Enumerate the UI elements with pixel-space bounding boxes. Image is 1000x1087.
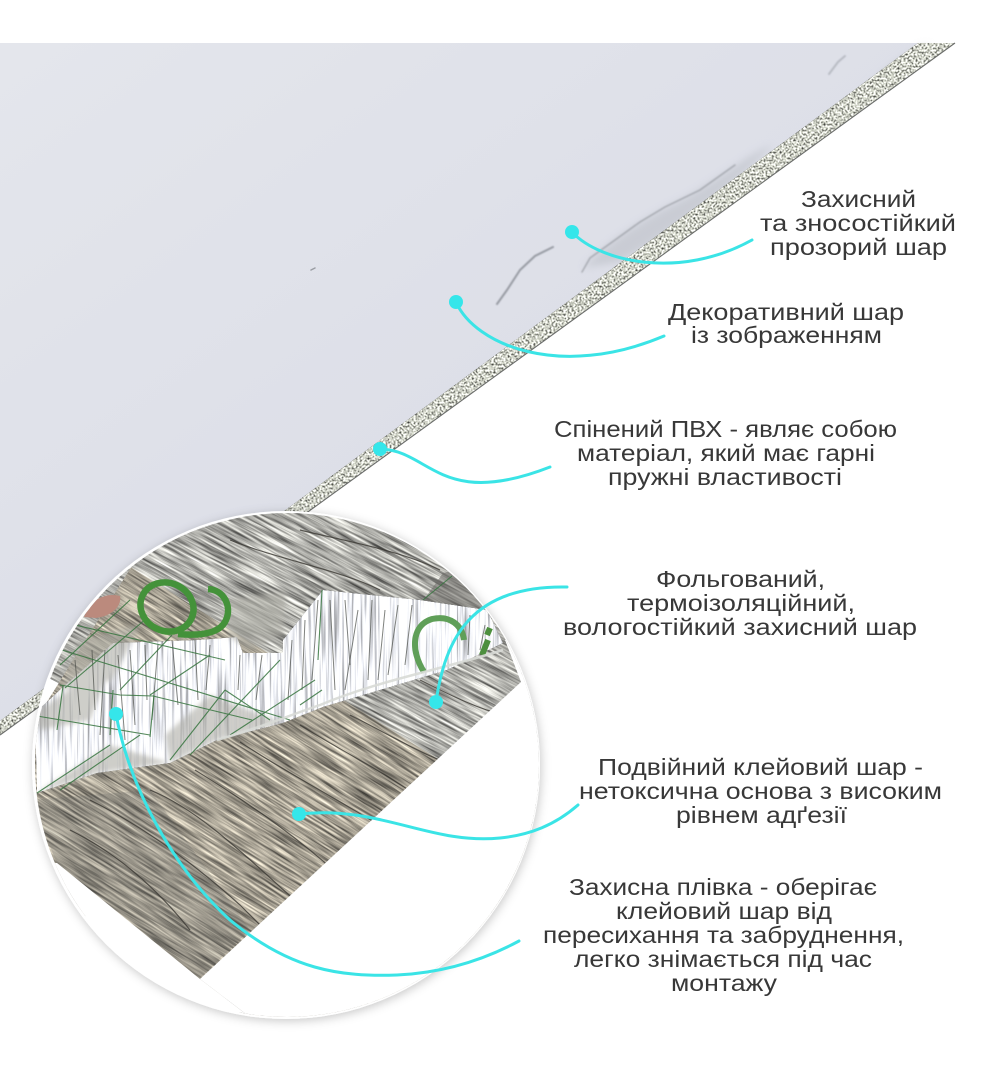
marble surface (0, 43, 955, 735)
finger (84, 595, 120, 618)
label text: Спінений ПВХ - являє собою (554, 416, 897, 442)
marker dot (565, 225, 579, 239)
marker dot (449, 295, 463, 309)
green reinforcing mesh (37, 576, 452, 793)
label text: та зносостійкий (760, 210, 956, 236)
panel: magnified back layers circle (28, 508, 546, 1026)
magnified photo (35, 513, 539, 1017)
label text: вологостійкий захисний шар (563, 614, 917, 640)
label text: клейовий шар від (616, 898, 833, 924)
label text (543, 874, 904, 996)
label text: із зображенням (691, 322, 882, 348)
label text: легко знімається під час (574, 946, 872, 972)
white region above the cut at the right (505, 640, 525, 682)
marker dot (373, 442, 387, 456)
label text (554, 416, 897, 490)
peeled foil film (35, 590, 503, 793)
label text (579, 754, 942, 828)
dark panel edge (0, 43, 955, 735)
leader line (572, 232, 752, 263)
leader line (380, 449, 550, 483)
film tear streaks (75, 600, 485, 740)
wood lower left grey area (30, 790, 250, 978)
white lens disc (32, 511, 540, 1019)
marker dot (429, 695, 443, 709)
label text (760, 186, 956, 260)
label text: термоізоляційний, (627, 590, 855, 616)
label text: нетоксична основа з високим (579, 778, 942, 804)
white background beyond the diagonal cut (200, 682, 539, 1017)
green logo right (415, 618, 490, 672)
dark far plank (424, 572, 487, 612)
callout: protective layer (565, 186, 956, 263)
label text: Декоративний шар (668, 299, 904, 325)
wood lower plank (35, 568, 534, 1017)
callout: foamed PVC (373, 416, 897, 490)
exposed adhesive patches on film (35, 590, 285, 793)
leader line (299, 805, 578, 839)
label text: пружні властивості (608, 464, 842, 490)
callout: foil layer (429, 566, 917, 709)
wood upper plank (50, 513, 539, 913)
marker dot (109, 707, 123, 721)
label text: монтажу (671, 970, 778, 996)
leader line (436, 587, 567, 702)
marker dot (292, 807, 306, 821)
label text: рівнем адґезії (676, 802, 848, 828)
label text: прозорий шар (770, 234, 947, 260)
label text: Захисна плівка - оберігає (569, 874, 877, 900)
label text: матеріал, який має гарні (577, 440, 875, 466)
callout: adhesive layer (292, 754, 942, 839)
label text: Подвійний клейовий шар - (598, 754, 923, 780)
marble veins (311, 50, 925, 304)
label text: пересихання та забруднення, (543, 922, 904, 948)
wood cracks (70, 530, 505, 935)
callout: decorative layer (449, 295, 904, 356)
film ridge (217, 650, 503, 740)
leader line (456, 302, 664, 356)
leader line (116, 714, 519, 975)
white region under the lower left edge (55, 863, 245, 1014)
foam edge layer (0, 43, 955, 735)
panel: marble panel (0, 43, 955, 735)
label text (668, 299, 904, 348)
label text: Захисний (801, 186, 916, 212)
label text (563, 566, 917, 640)
callout: protective film (109, 707, 904, 996)
label text: Фольгований, (656, 566, 825, 592)
green logo left (137, 579, 232, 638)
